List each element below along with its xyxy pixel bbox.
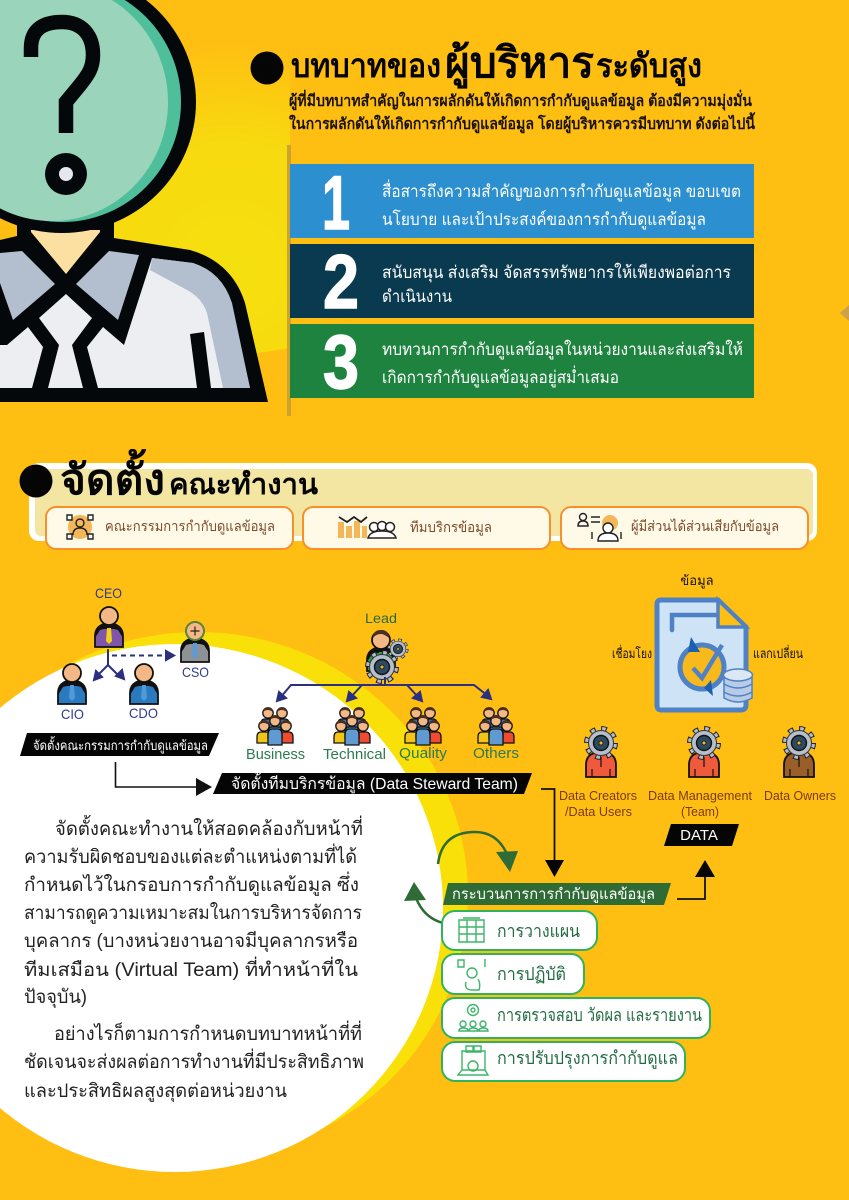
- arrows: governance cycle: [404, 832, 518, 923]
- CIO: CIO: [61, 706, 84, 722]
- body paragraph: ปัจจุบัน): [24, 987, 87, 1009]
- card: stakeholders: ผู้มีส่วนได้ส่วนเสียกับข้อมูล: [631, 518, 779, 535]
- CSO: CSO: [182, 664, 209, 680]
- body paragraph: กำหนดไว้ในกรอบการกำกับดูแลข้อมูล ซึ่ง: [24, 871, 359, 896]
- step: planning: การวางแผน: [497, 921, 580, 941]
- step: improvement: การปรับปรุงการกำกับดูแล: [497, 1048, 678, 1069]
- step: monitoring: [442, 998, 710, 1038]
- icon: target and people: [459, 1004, 488, 1031]
- arrow: committee to steward team: [116, 762, 212, 796]
- card: data stewards: ทีมบริกรข้อมูล: [410, 519, 492, 536]
- heading: executive role: [250, 39, 702, 89]
- body paragraph: สามารถดูความเหมาะสมในการบริหารจัดการ: [24, 902, 362, 924]
- data owners: [764, 729, 836, 803]
- team: others: [473, 707, 519, 762]
- arrow: process to data: [677, 860, 715, 899]
- icon: data document: [657, 600, 752, 710]
- icon: lightbulb and head: [458, 959, 485, 990]
- data owners: Data Owners: [764, 789, 836, 803]
- CDO: CDO: [129, 705, 158, 721]
- CDO: [129, 664, 158, 721]
- panel: role 3: [290, 320, 754, 405]
- panel: role 3: 3: [323, 320, 359, 405]
- panel: working group banner: [29, 463, 817, 541]
- label: steward team: จัดตั้งทีมบริกรข้อมูล (Data Steward Team): [231, 772, 518, 794]
- vertical divider bar: [287, 145, 291, 416]
- heading: working group: [20, 448, 318, 503]
- body paragraph: ความรับผิดชอบของแต่ละตำแหน่งตามที่ได้: [24, 843, 357, 868]
- team: business: Business: [246, 747, 305, 763]
- yellow glow behind executive: [0, 40, 290, 400]
- panel: role 1: สื่อสารถึงความสำคัญของการกำกับดูแลข้อมูล ขอบเขต: [382, 179, 741, 202]
- white circle: [0, 644, 443, 1172]
- team: quality: [399, 707, 448, 762]
- panel: role 3: เกิดการกำกับดูแลข้อมูลอยู่สม่ำเสมอ: [382, 365, 619, 388]
- step: monitoring: การตรวจสอบ วัดผล และรายงาน: [497, 1005, 702, 1025]
- team: technical: [323, 707, 386, 763]
- team: business: [246, 707, 305, 763]
- team: quality: Quality: [399, 746, 448, 762]
- body paragraph: [24, 815, 364, 1103]
- card: committee: คณะกรรมการกำกับดูแลข้อมูล: [105, 518, 275, 535]
- intro text: [289, 89, 755, 135]
- panel: role 1: 1: [322, 161, 350, 246]
- data document with labels: แลกเปลี่ยน: [753, 645, 803, 661]
- step: improvement: [442, 1042, 685, 1081]
- data management: Data Management: [648, 789, 753, 803]
- panel: role 3: ทบทวนการกำกับดูแลข้อมูลในหน่วยงานและส่งเสริมให้: [382, 339, 743, 360]
- step: implementation: [442, 954, 584, 994]
- CIO: [58, 664, 86, 722]
- data creators: [559, 729, 637, 819]
- lead: [365, 610, 407, 681]
- card: stakeholders: [561, 507, 808, 549]
- small side marker: [840, 305, 849, 321]
- icon: committee: [67, 515, 93, 539]
- arrow: steward team to process: [541, 789, 564, 877]
- team: technical: Technical: [323, 747, 386, 763]
- heading: working group: คณะทำงาน: [169, 469, 318, 501]
- body paragraph: บุคลากร (บางหน่วยงานอาจมีบุคลากรหรือ: [24, 930, 358, 953]
- body paragraph: และประสิทธิผลสูงสุดต่อหน่วยงาน: [24, 1081, 287, 1103]
- data document with labels: ข้อมูล: [680, 573, 714, 589]
- data management: (Team): [681, 805, 719, 819]
- body paragraph: จัดตั้งคณะทำงานให้สอดคล้องกับหน้าที่: [55, 815, 363, 840]
- icon: laptop and gear: [458, 1046, 488, 1075]
- heading: executive role: ผู้บริหาร: [445, 39, 594, 89]
- heading: executive role: บทบาทของ: [291, 47, 441, 84]
- heading: working group: จัดตั้ง: [60, 448, 165, 503]
- panel: role 2: 2: [323, 240, 359, 325]
- intro text: ผู้ที่มีบทบาทสำคัญในการผลักดันให้เกิดการกำกับดูแลข้อมูล ต้องมีความมุ่งมั่น: [289, 89, 752, 112]
- data creators: Data Creators: [559, 789, 637, 803]
- yellow crescent: [0, 632, 468, 1158]
- card: committee: [46, 507, 293, 549]
- panel: role 2: ดำเนินงาน: [382, 287, 452, 306]
- CEO: [95, 585, 123, 647]
- body paragraph: อย่างไรก็ตามการกำหนดบทบาทหน้าที่ที่: [54, 1020, 362, 1045]
- lead: Lead: [365, 610, 397, 626]
- label: DATA: [664, 824, 739, 846]
- data management: [648, 729, 753, 819]
- panel: role 2: สนับสนุน ส่งเสริม จัดสรรทรัพยากรให้เพียงพอต่อการ: [382, 262, 731, 283]
- heading: executive role: ระดับสูง: [596, 47, 702, 87]
- step: implementation: การปฏิบัติ: [497, 964, 566, 984]
- icon: chart and team: [338, 517, 396, 538]
- body paragraph: ทีมเสมือน (Virtual Team) ที่ทำหน้าที่ใน: [24, 956, 358, 981]
- team: others: Others: [473, 746, 519, 762]
- label: set up committee: [20, 733, 219, 756]
- CSO: [181, 622, 209, 680]
- panel: role 2: [290, 240, 754, 325]
- panel: role 1: [290, 161, 754, 246]
- data creators: /Data Users: [565, 805, 632, 819]
- step: planning: [442, 911, 597, 950]
- body paragraph: ชัดเจนจะส่งผลต่อการทำงานที่มีประสิทธิภาพ: [24, 1048, 364, 1073]
- data document with labels: [612, 573, 803, 710]
- label: governance process: กระบวนการการกำกับดูแลข้อมูล: [452, 886, 655, 903]
- icon: faceless executive with question mark: [0, 0, 268, 402]
- panel: role 1: นโยบาย และเป้าประสงค์ของการกำกับดูแลข้อมูล: [382, 209, 706, 230]
- arrows: lead to teams: [277, 677, 491, 701]
- arrows: CEO to officers: [94, 649, 174, 680]
- card: data stewards: [303, 507, 550, 549]
- CEO: CEO: [95, 585, 122, 601]
- label: set up committee: จัดตั้งคณะกรรมการกำกับดูแลข้อมูล: [33, 736, 208, 754]
- data document with labels: เชื่อมโยง: [612, 645, 652, 661]
- icon: calendar: [459, 918, 484, 942]
- icon: stakeholders: [578, 514, 621, 541]
- intro text: ในการผลักดันให้เกิดการกำกับดูแลข้อมูล โดยผู้บริหารควรมีบทบาท ดังต่อไปนี้: [289, 112, 755, 135]
- org chart: committee: [58, 585, 209, 722]
- label: DATA: DATA: [680, 827, 718, 844]
- org chart: stewards: [246, 610, 519, 763]
